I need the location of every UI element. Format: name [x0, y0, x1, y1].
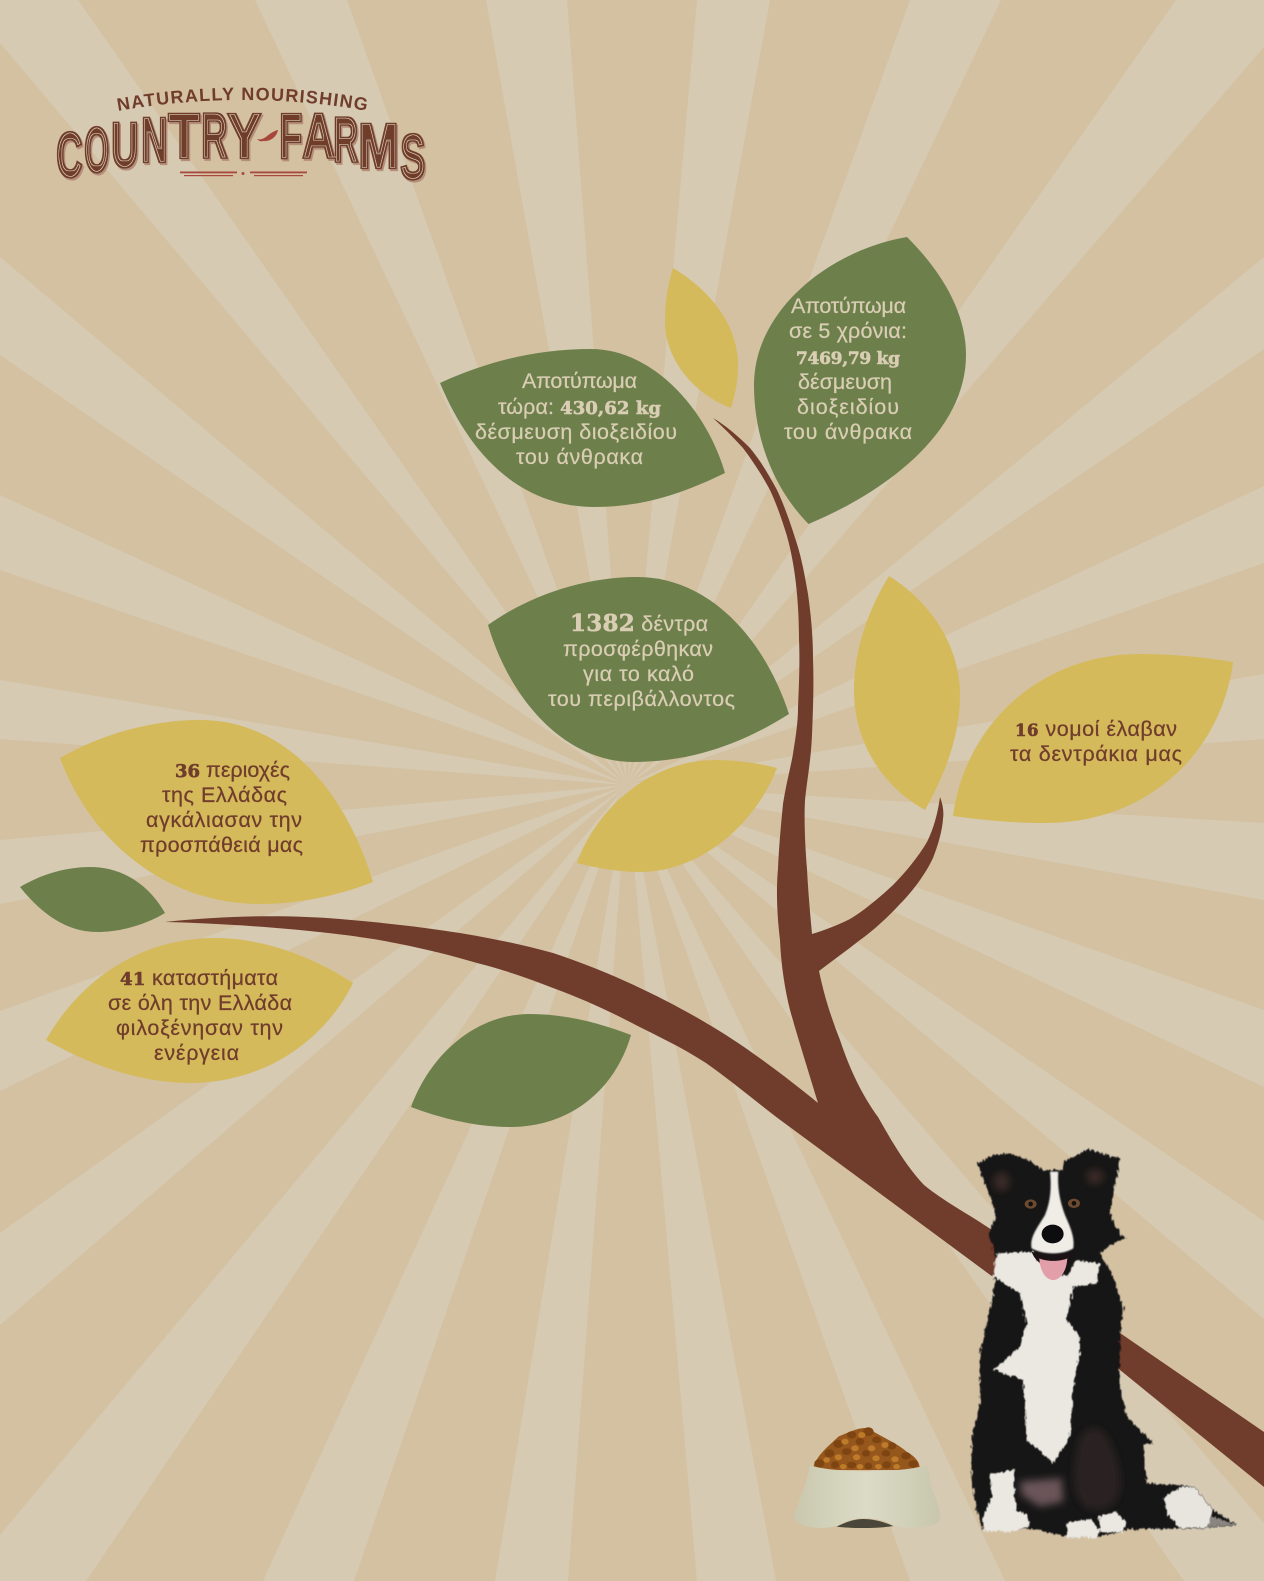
leaf text: stores: ενέργεια: [154, 1041, 239, 1065]
logo wordmark: F: [279, 101, 302, 173]
logo wordmark: O: [84, 114, 109, 186]
logo tagline: NATURALLY NOURISHING: [117, 88, 367, 111]
yellow leaf: right upper: [854, 576, 960, 810]
logo wordmark: R: [333, 104, 358, 176]
dog body silhouette: [972, 1149, 1237, 1537]
dog eyes: [1025, 1199, 1080, 1209]
dog inner ears: [994, 1169, 1104, 1191]
logo wordmark: Y: [227, 101, 262, 172]
leaf text: trees offered: 1382 δέντρα: [570, 610, 708, 637]
logo wordmark: M: [358, 111, 399, 183]
logo wordmark: R: [201, 102, 228, 173]
logo: Country Farms: [56, 88, 426, 194]
leaf text: stores: φιλοξένησαν την: [116, 1016, 283, 1040]
leaf text: footprint now: [475, 369, 677, 469]
logo wordmark: [56, 101, 426, 194]
dog nose: [1042, 1225, 1064, 1243]
logo wordmark: N: [141, 106, 168, 177]
leaf text: prefectures: [1010, 717, 1182, 766]
leaf text: stores: 41 καταστήματα: [120, 966, 278, 990]
leaf text: footprint in 5 years: σε 5 χρόνια:: [789, 319, 907, 343]
leaf text: prefectures: 16 νομοί έλαβαν: [1015, 717, 1177, 741]
leaf text: footprint in 5 years: 7469,79 kg: [796, 349, 900, 369]
logo wordmark: A: [302, 101, 335, 172]
small green leaf: left: [20, 867, 165, 932]
leaf text: trees offered: προσφέρθηκαν: [563, 637, 713, 661]
small yellow leaf: top: [665, 268, 738, 408]
leaf text: regions of Greece: της Ελλάδας: [162, 783, 287, 807]
leaf text: footprint in 5 years: δέσμευση: [798, 370, 892, 394]
leaf: regions of Greece: [60, 720, 373, 904]
green leaf: bottom: [411, 1014, 631, 1127]
leaf: footprint now: [440, 349, 725, 507]
leaf text: footprint now: του άνθρακα: [516, 445, 643, 469]
logo wordmark: S: [400, 122, 426, 194]
leaf text: footprint now: Αποτύπωμα: [522, 369, 637, 393]
logo wordmark: T: [168, 101, 200, 172]
leaf text: footprint in 5 years: Αποτύπωμα: [791, 294, 906, 318]
leaf: prefectures: [953, 654, 1233, 823]
leaf text: footprint in 5 years: διοξειδίου: [797, 395, 899, 419]
leaf text: regions of Greece: [140, 758, 303, 857]
leaf text: regions of Greece: προσπάθειά μας: [140, 833, 303, 857]
leaf text: footprint now: τώρα: 430,62 kg: [498, 395, 661, 419]
leaf text: regions of Greece: 36 περιοχές: [175, 758, 290, 782]
logo leaf ornament: [257, 130, 278, 141]
leaf: stores: [46, 938, 353, 1083]
leaf text: regions of Greece: αγκάλιασαν την: [146, 808, 302, 832]
logo wordmark: U: [111, 110, 139, 182]
leaf text: stores: [108, 966, 292, 1065]
icon: food bowl with kibble: [794, 1427, 940, 1528]
dog tail tip: [1163, 1487, 1238, 1528]
tree trunk and branches: [165, 418, 1264, 1487]
leaf text: footprint in 5 years: του άνθρακα: [784, 420, 912, 444]
dog white face blaze: [1031, 1172, 1074, 1253]
leaf text: footprint now: δέσμευση διοξειδίου: [475, 420, 677, 444]
leaf: trees offered: [488, 577, 789, 762]
dog mouth and tongue: [1032, 1250, 1075, 1280]
logo wordmark: C: [56, 121, 83, 192]
leaf text: footprint in 5 years: [784, 294, 912, 444]
leaf text: prefectures: τα δεντράκια μας: [1010, 742, 1182, 766]
icon: border collie dog: [972, 1149, 1238, 1538]
leaf text: stores: σε όλη την Ελλάδα: [108, 991, 292, 1015]
dog white front leg and paws: [983, 1470, 1127, 1538]
leaf text: trees offered: του περιβάλλοντος: [548, 687, 735, 711]
leaf text: trees offered: [548, 610, 735, 711]
dog white chest and ruff: [993, 1252, 1100, 1463]
dog belly: [1020, 1478, 1063, 1507]
leaf text: trees offered: για το καλό: [583, 662, 694, 686]
yellow leaf: center: [577, 760, 777, 872]
leaf: footprint in 5 years: [754, 237, 966, 524]
dog brown undertone: [1074, 1428, 1121, 1510]
logo underline ornament: [180, 172, 307, 176]
